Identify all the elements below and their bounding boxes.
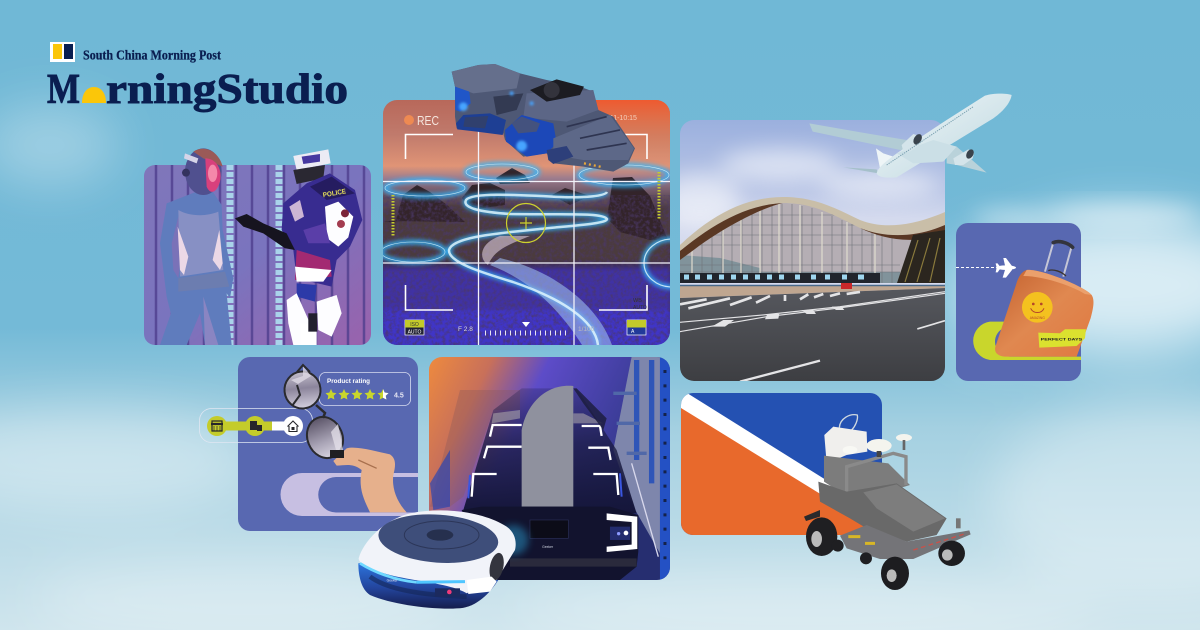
- viewfinder grid lines: [383, 132, 670, 345]
- hand: [333, 448, 407, 512]
- lavender pill shape: [280, 473, 418, 516]
- round delivery robot: [358, 510, 528, 609]
- mower: seat and frame: [824, 453, 910, 498]
- sticker: label: PERFECT DAYS: [1041, 338, 1084, 342]
- rating card: Product rating: [327, 378, 370, 385]
- panel: camera viewfinder over glowing river landscape: AUTO: [633, 305, 647, 311]
- logo: MorningStudio: M: [47, 67, 80, 113]
- timestamp: 2:11-10:15: [604, 115, 637, 122]
- panel: court surface: [681, 393, 971, 590]
- shutter value: 1/100: [578, 326, 595, 333]
- mode badge: A: [631, 329, 635, 335]
- logo: South China Morning Post: [50, 42, 221, 62]
- logo: MorningStudio: rningStudio: [106, 67, 348, 113]
- airplane: [809, 94, 1012, 178]
- terminal wave roof: [680, 197, 945, 251]
- ISO badge: AUTO: [408, 330, 422, 336]
- shelving left: [430, 390, 520, 507]
- text: South China Morning Post: South China Morning Post: [83, 48, 221, 62]
- icon: airplane: [996, 258, 1016, 278]
- aperture value: F 2.8: [458, 326, 473, 333]
- yellow-green route pill: [973, 322, 1081, 360]
- panel: warehouse robots: [358, 357, 670, 609]
- delivery route tracker: [200, 408, 312, 442]
- exposure scale: [485, 330, 567, 336]
- dashed flight path: [956, 266, 994, 268]
- rating card: 4.5: [394, 392, 404, 400]
- panel: camera viewfinder over glowing river landscape: [383, 64, 670, 345]
- spaceship: [452, 64, 635, 172]
- icon: delivery: [245, 416, 265, 436]
- REC indicator: REC: [417, 113, 439, 128]
- mower: GPS domes: [843, 434, 912, 457]
- audio level meters: [393, 172, 659, 236]
- focus reticle: [506, 204, 546, 242]
- sunglasses: [283, 365, 349, 464]
- sticker: smiley: AMAZING: [1030, 316, 1045, 320]
- robot: police robot: [235, 149, 362, 345]
- panel: luggage: [956, 223, 1093, 381]
- suitcase: [995, 242, 1093, 357]
- white balance: WB: [633, 298, 642, 304]
- concrete column: [522, 386, 573, 507]
- viewfinder corner brackets: [406, 134, 647, 310]
- terminal glass facade: [680, 203, 945, 283]
- icon: SCMP square mark: [50, 42, 75, 62]
- mower: body: [804, 482, 971, 559]
- panel: humanoid robots: [144, 148, 371, 345]
- road with lane markings: [680, 288, 945, 381]
- mode badge: [627, 320, 646, 335]
- queue of robots: [463, 388, 637, 513]
- REC indicator: [404, 115, 439, 125]
- icon: home: [283, 416, 303, 436]
- rating card: [320, 372, 410, 406]
- autonomous lawn mower: [804, 415, 971, 590]
- blue rack upright: [660, 357, 670, 580]
- panel: airport terminal: [660, 94, 1012, 382]
- ISO badge: ISO: [410, 322, 419, 328]
- mower: tank: [824, 415, 867, 463]
- mower: wheels: [806, 517, 965, 590]
- shelving right: [613, 357, 660, 553]
- ISO badge: [405, 320, 424, 336]
- panel: online shopping sunglasses: [200, 357, 418, 531]
- robot: police robot: POLICE: [322, 188, 347, 199]
- icon: store: [207, 416, 227, 436]
- robot: female android: [160, 148, 233, 345]
- front warehouse robot: Geeker: [542, 545, 554, 549]
- round delivery robot: Geeker: [387, 579, 398, 583]
- front warehouse robot: [462, 507, 638, 580]
- ground and curb: [680, 285, 945, 298]
